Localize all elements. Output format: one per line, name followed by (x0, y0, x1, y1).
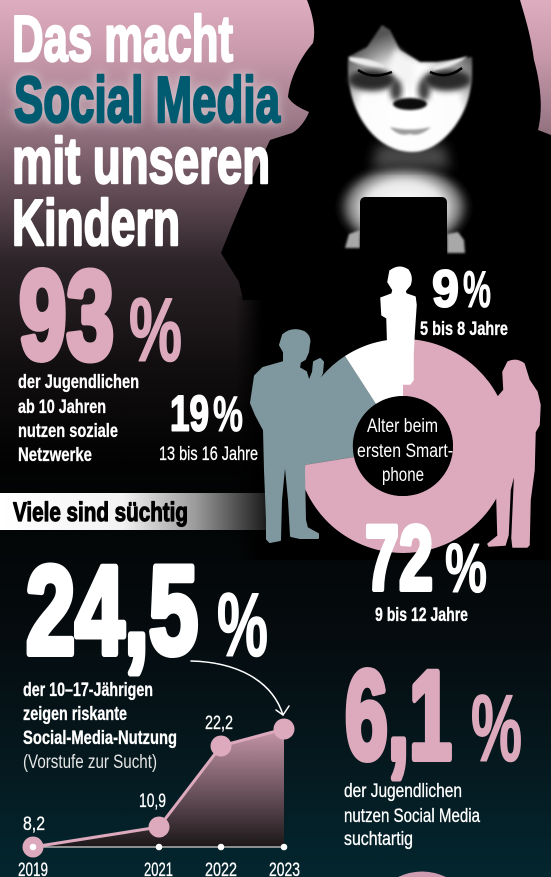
axis (33, 846, 284, 848)
donut hole (353, 396, 453, 496)
bar: section heading: Viele sind süchtig (13, 497, 188, 527)
title: Kindern (12, 186, 180, 259)
donut centre label: Alter beim (367, 416, 438, 437)
label: 9 %: % (463, 261, 491, 319)
text: der Jugendlichen ab 10 Jahren: der Jugendlichen (18, 372, 139, 393)
label: 19 %: % (213, 386, 243, 442)
label: 72 %: 72 (365, 508, 433, 610)
silhouette: girl, pink (483, 360, 540, 547)
text: der Jugendlichen ab 10 Jahren: ab 10 Jahren (18, 397, 106, 418)
hands (345, 230, 465, 253)
arrow to 2023 (191, 661, 289, 715)
segment: 9 % white (345, 339, 403, 404)
title highlight glow: Social Media (13, 63, 280, 136)
photo: girl lit by smartphone (221, 0, 551, 560)
value labels (23, 713, 233, 835)
black fade below body (235, 296, 551, 560)
text: riskante Nutzung: der 10–17-Jährigen (23, 680, 153, 701)
area under line (33, 729, 284, 847)
line chart: riskante Nutzung 2019-2023 (18, 713, 300, 877)
value labels: 22,2 (205, 713, 233, 734)
title: Social Media (14, 63, 281, 136)
eye lashes (358, 68, 462, 76)
value labels: 8,2 (23, 814, 45, 835)
data line (33, 729, 284, 847)
donut centre label: ersten Smart- (357, 441, 453, 462)
segment: 72 % pink (298, 339, 510, 553)
text: suchtartige Nutzung (344, 781, 480, 850)
stat: 93 %: 93 (19, 246, 114, 386)
axis ticks (30, 844, 287, 850)
text: riskante Nutzung: (Vorstufe zur Sucht) (23, 752, 157, 773)
text: riskante Nutzung: Social-Media-Nutzung (23, 728, 177, 749)
donut centre label: phone (382, 465, 424, 486)
donut chart: age at first smartphone (296, 339, 510, 553)
bar: section heading (0, 493, 272, 530)
text: riskante Nutzung (23, 680, 177, 773)
face (348, 25, 472, 168)
label: 19 %: 19 (170, 386, 209, 442)
label: 19 % (159, 386, 258, 465)
year labels (18, 860, 300, 877)
silhouette: child, white (381, 267, 416, 384)
silhouette: boy, grey (251, 330, 323, 542)
forehead and nose bridge highlight (390, 48, 414, 90)
label: 9 % (420, 260, 508, 340)
title (12, 2, 281, 259)
text: der Jugendlichen ab 10 Jahren: nutzen soziale (18, 421, 118, 442)
next section circle (cut off) (398, 872, 446, 877)
value labels: 10,9 (139, 791, 166, 812)
nose bridge shadows (390, 79, 402, 101)
mouth (390, 127, 431, 135)
nose shadow (393, 98, 427, 110)
label: 9 %: 5 bis 8 Jahre (420, 319, 508, 340)
label: 72 %: % (445, 529, 487, 607)
text: suchtartige Nutzung: nutzen Social Media (344, 806, 480, 827)
face shape (348, 25, 472, 152)
text: suchtartige Nutzung: der Jugendlichen (344, 781, 462, 802)
title: Das macht (12, 2, 233, 75)
stat: 24,5 %: 24,5 (26, 542, 198, 680)
donut centre label (357, 416, 453, 486)
stat: 93 %: % (129, 281, 182, 381)
data points (22, 718, 294, 858)
text: der Jugendlichen ab 10 Jahren: Netzwerke (18, 445, 92, 466)
brow highlights (349, 56, 468, 70)
stat: 24,5 %: % (217, 576, 268, 676)
silhouette: hair and body (221, 0, 551, 300)
label: 19 %: 13 bis 16 Jahre (159, 444, 258, 465)
label: 72 %: 9 bis 12 Jahre (375, 605, 468, 626)
neck (372, 145, 450, 168)
segment: 19 % grey (296, 356, 376, 466)
chest glow (334, 161, 474, 253)
text: suchtartige Nutzung: suchtartig (344, 829, 413, 850)
text: der Jugendlichen ab 10 Jahren (18, 372, 139, 466)
label: 9 %: 9 (432, 260, 459, 318)
stat: 6,1 %: 6,1 (345, 646, 452, 786)
smartphone (360, 197, 447, 267)
eye shadows (348, 69, 396, 91)
title: mit unseren (12, 124, 270, 197)
text: riskante Nutzung: zeigen riskante (23, 704, 127, 725)
